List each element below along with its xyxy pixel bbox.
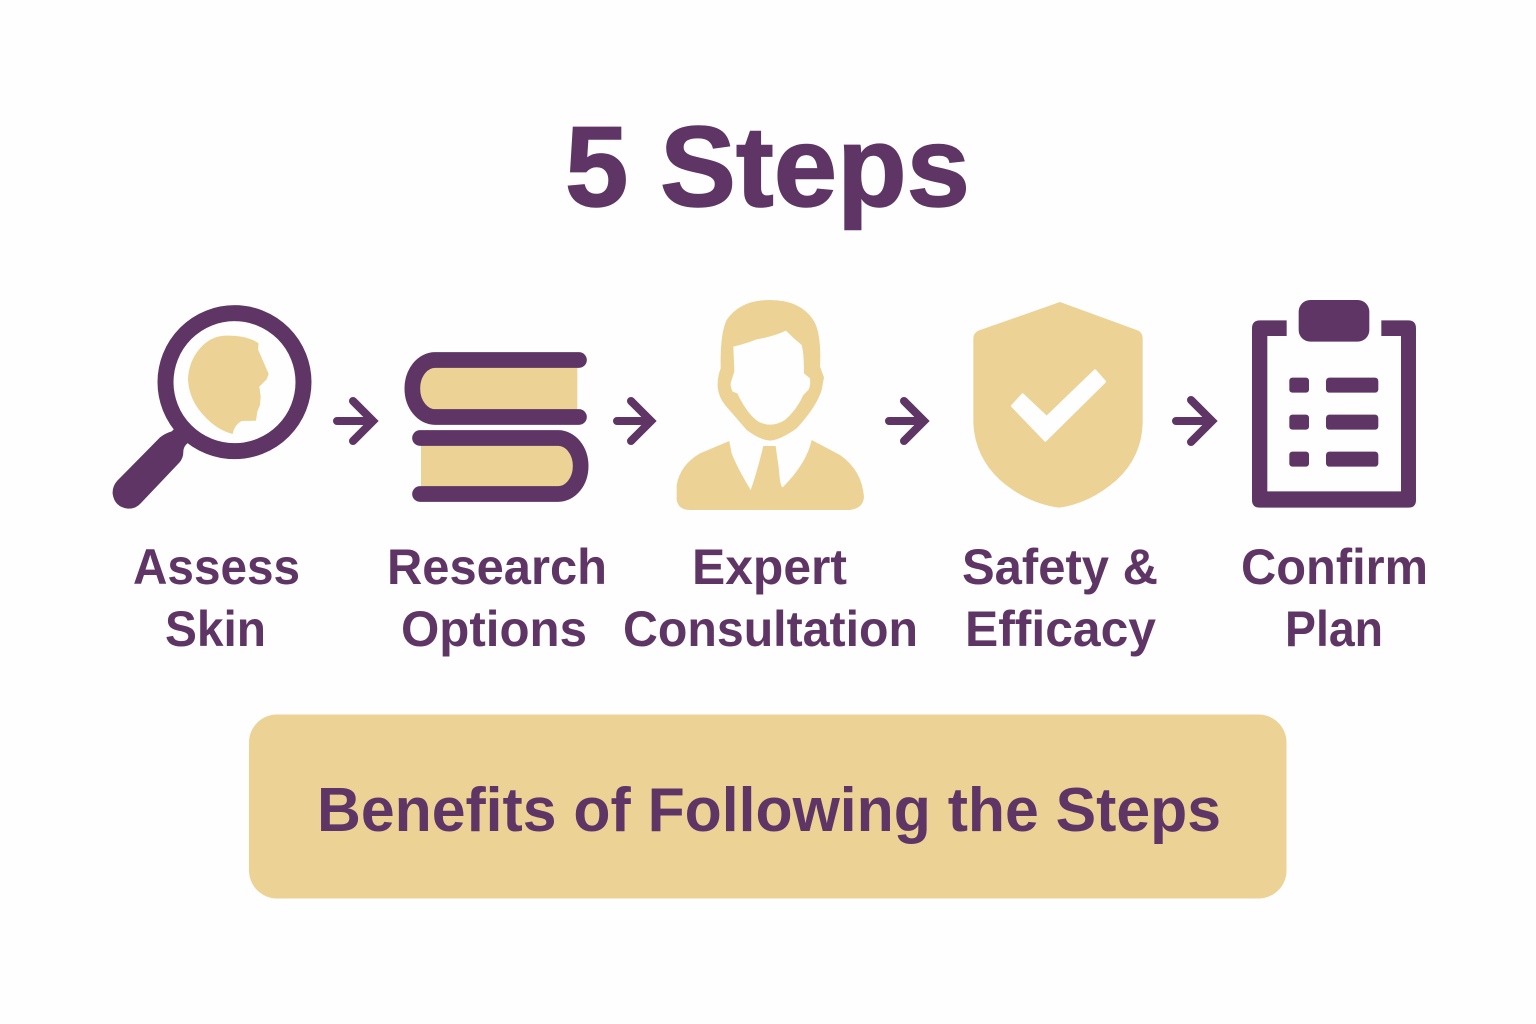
icon: expert person — [677, 300, 864, 510]
label: Confirm Plan: Confirm — [1241, 539, 1428, 595]
label: Safety & Efficacy: Safety & — [962, 539, 1158, 595]
banner: benefits — [249, 714, 1286, 898]
arrow 4 — [1176, 400, 1212, 442]
label: Research Options — [387, 539, 607, 657]
icon: shield with check — [973, 302, 1143, 508]
label: Research Options: Research — [387, 539, 607, 595]
label: Assess Skin — [133, 539, 300, 657]
arrow 3 — [889, 401, 924, 441]
label: Expert Consultation: Expert — [692, 539, 847, 595]
label: Research Options: Options — [401, 601, 587, 657]
label: Assess Skin: Skin — [165, 601, 266, 657]
icon: magnifying glass over face — [113, 313, 303, 509]
arrow 1 — [337, 401, 373, 441]
label: Safety & Efficacy — [962, 539, 1158, 657]
banner text: Benefits of Following the Steps — [317, 776, 1221, 845]
arrow 2 — [617, 401, 651, 441]
label: Confirm Plan — [1241, 539, 1428, 657]
label: Assess Skin: Assess — [133, 539, 300, 595]
label: Confirm Plan: Plan — [1285, 601, 1383, 657]
title: 5 Steps — [565, 104, 970, 231]
label: Safety & Efficacy: Efficacy — [965, 601, 1156, 657]
label: Expert Consultation: Consultation — [623, 601, 918, 657]
icon: clipboard checklist — [1252, 300, 1416, 508]
label: Expert Consultation — [623, 539, 918, 657]
icon: stacked books — [412, 360, 581, 494]
